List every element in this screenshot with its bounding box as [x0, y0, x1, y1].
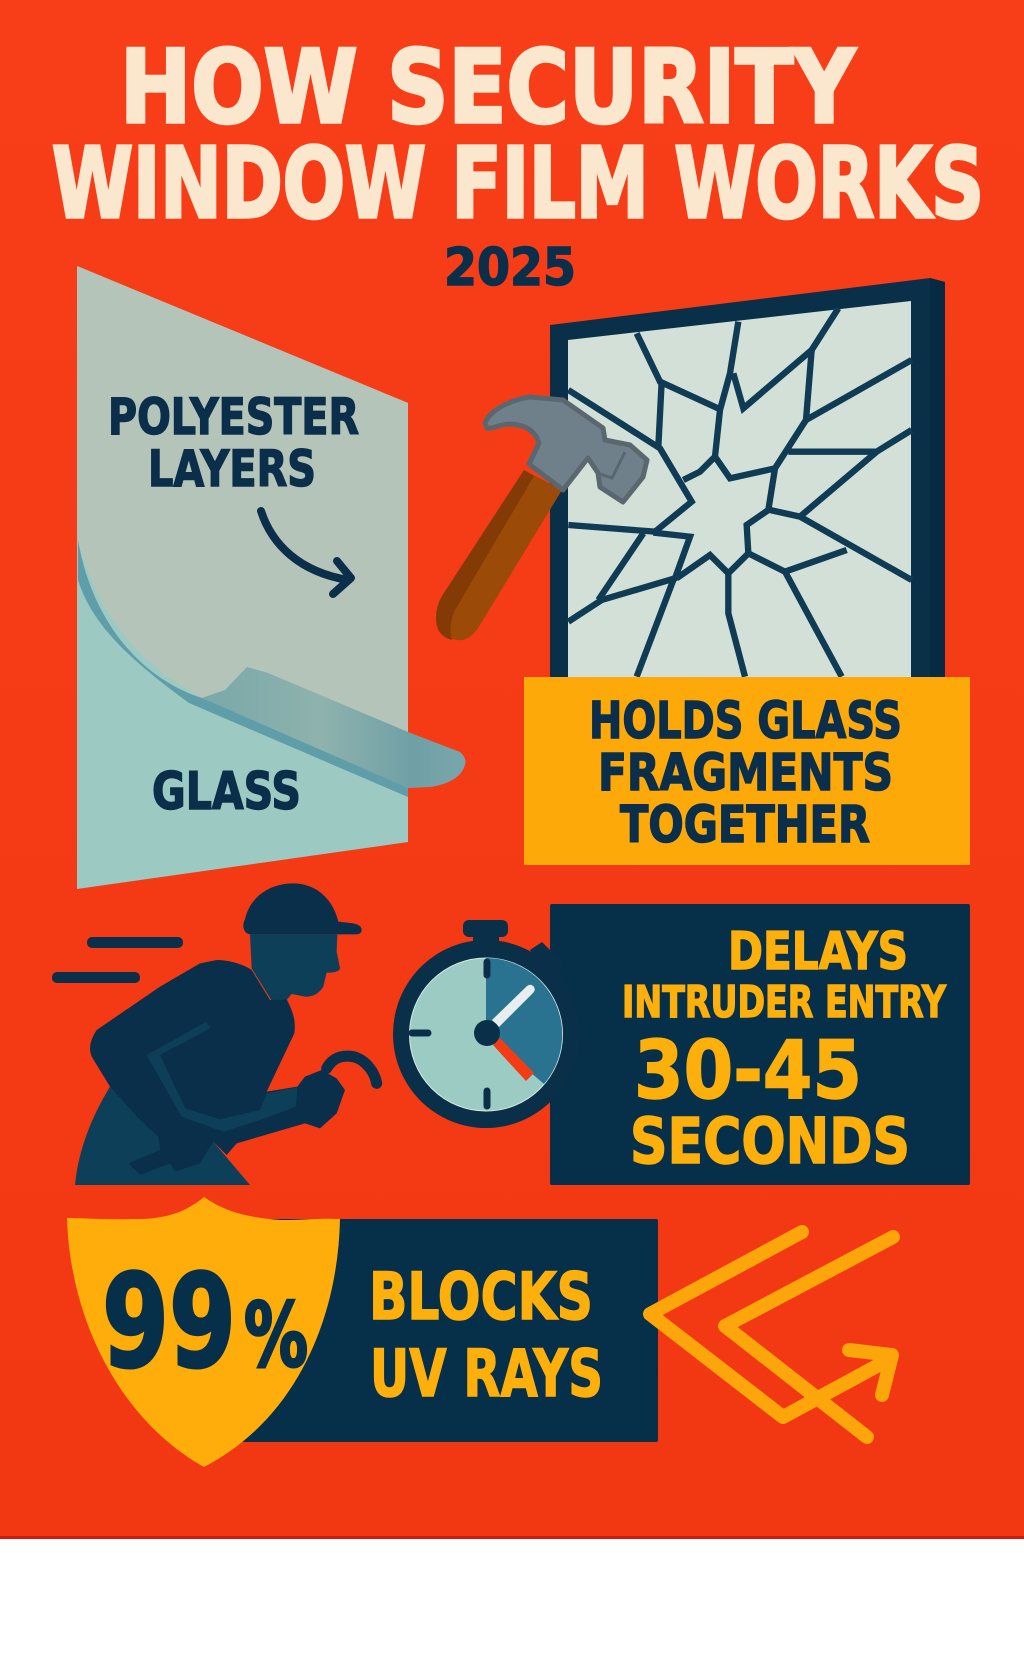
icon: stopwatch	[393, 920, 579, 1128]
callout: blocks UV rays	[67, 1197, 658, 1467]
callout: delays intruder entry	[550, 904, 970, 1185]
navy band	[200, 1219, 658, 1442]
hub	[474, 1020, 500, 1046]
icon: hammer	[436, 397, 647, 640]
year: 2025	[444, 238, 576, 298]
label: polyester layers	[108, 388, 359, 498]
intruder figure	[75, 883, 377, 1185]
red hand	[493, 1038, 534, 1081]
panel: shattered window	[550, 278, 945, 677]
arrow	[261, 511, 351, 594]
title: HOW SECURITY	[120, 28, 857, 146]
callout: holds glass fragments: HOLDS GLASS	[589, 692, 902, 751]
crown	[463, 920, 562, 990]
ticks	[412, 962, 487, 1106]
polyester film	[77, 266, 408, 735]
callout: holds glass fragments	[524, 677, 970, 865]
label: polyester layers: POLYESTER	[108, 388, 359, 446]
panel: film layers	[77, 266, 465, 889]
icon: reflected uv arrows	[650, 1232, 893, 1437]
icon: intruder	[52, 883, 377, 1185]
speed lines	[52, 937, 183, 983]
shield	[67, 1197, 340, 1467]
face	[410, 958, 562, 1111]
callout: holds glass fragments: TOGETHER	[620, 796, 870, 855]
peeling edge	[78, 540, 408, 797]
hammer head	[485, 397, 647, 502]
label: blocks uv rays: BLOCKS	[369, 1260, 593, 1335]
callout: delays intruder entry: 30-45	[634, 1024, 862, 1117]
label: blocks uv rays: UV RAYS	[370, 1337, 603, 1412]
label: glass: GLASS	[152, 762, 301, 822]
peeling flap	[202, 667, 465, 788]
glass	[568, 301, 911, 677]
cracks	[568, 308, 912, 677]
label: blocks uv rays	[369, 1260, 603, 1412]
glass pane	[77, 266, 408, 889]
callout: delays intruder entry: SECONDS	[630, 1105, 910, 1178]
hammer handle	[436, 470, 562, 640]
white hand	[492, 985, 535, 1027]
case	[393, 940, 579, 1128]
window frame	[550, 278, 945, 677]
label: polyester layers: LAYERS	[148, 440, 316, 498]
99 percent: 99	[102, 1248, 236, 1397]
elapsed wedge	[486, 958, 562, 1084]
callout: holds glass fragments: FRAGMENTS	[598, 744, 893, 803]
callout: delays intruder entry: DELAYS	[728, 922, 908, 982]
99 percent: %	[244, 1284, 308, 1387]
title	[52, 28, 984, 240]
